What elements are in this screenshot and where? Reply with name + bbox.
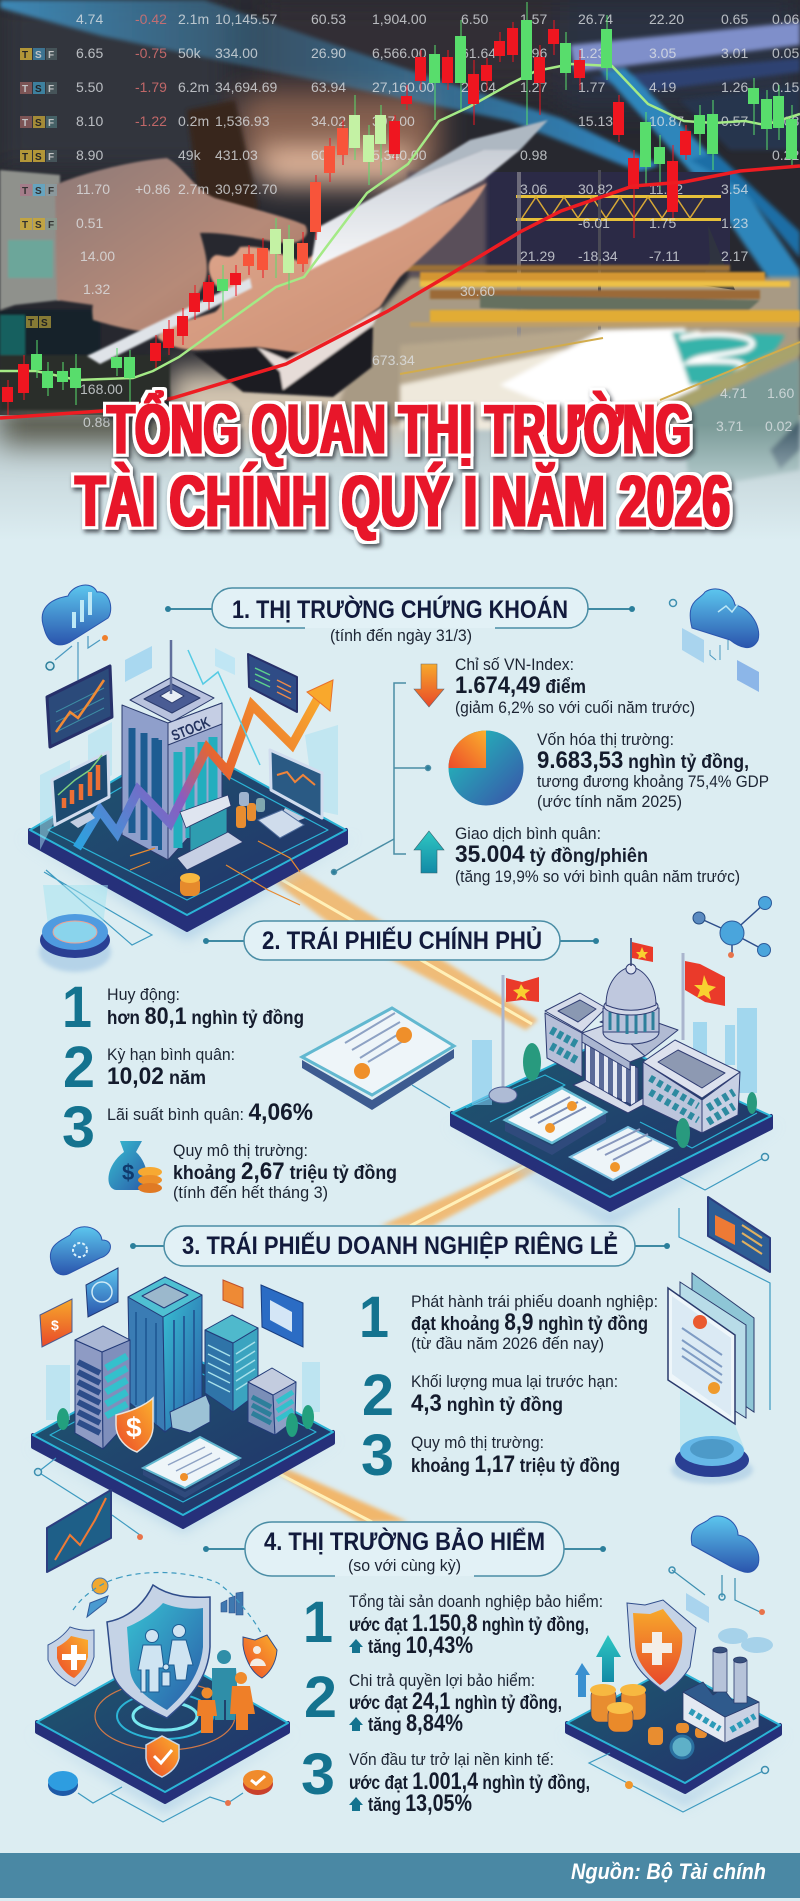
section 1 illustration: stock market: [20, 640, 356, 972]
dollar shield: $: [126, 1412, 142, 1443]
stat: VN-Index: (giảm 6,2% so với cuối năm trước): [455, 698, 695, 717]
cloud icon section 3: [50, 1227, 110, 1275]
heading text: 1. THỊ TRƯỜNG CHỨNG KHOÁN: [232, 594, 568, 624]
header fade to background: [0, 425, 800, 541]
market data table: 1.27: [520, 79, 547, 95]
photo: suit shoulder: [187, 100, 258, 232]
icon: money bag: [108, 1141, 162, 1193]
stat: market cap: 9.683,53 nghìn tỷ đồng,: [537, 747, 749, 774]
market data table: 0.65: [721, 11, 748, 27]
item 1: Phát hành trái phiếu doanh nghiệp:: [411, 1292, 658, 1311]
section 3 illustration: corporate towers: [26, 1268, 340, 1540]
market data table: 22.20: [649, 11, 684, 27]
market data table: 34.02: [311, 113, 346, 129]
chart panel: [47, 1490, 111, 1572]
market size: Quy mô thị trường:: [173, 1141, 308, 1160]
stat: market cap: tương đương khoảng 75,4% GDP: [537, 772, 769, 791]
stock sign: STOCK: [169, 714, 213, 745]
right wing: [643, 1040, 740, 1133]
market data table: 14.00: [80, 248, 115, 264]
market data table: 6.2m: [178, 79, 209, 95]
market data table: 2.7m: [178, 181, 209, 197]
stat: market cap: Vốn hóa thị trường:: [537, 730, 674, 749]
note panel: [686, 1593, 709, 1623]
stat: VN-Index: [414, 655, 695, 717]
market data table: 2.1m: [178, 11, 209, 27]
cloud icon left: [42, 585, 111, 680]
icon: small up arrow: [349, 1717, 363, 1731]
T S F ticker flags: T: [28, 318, 34, 329]
item 3: Lãi suất bình quân: 4,06%: [107, 1099, 313, 1126]
market data table: 6.65: [76, 45, 103, 61]
market data table: 334.00: [215, 45, 258, 61]
T S F ticker flags: S: [35, 118, 42, 129]
T S F ticker flags: T: [22, 50, 28, 61]
item 2: [362, 1363, 618, 1428]
market data table: 5,340.00: [372, 147, 427, 163]
market data table: [76, 11, 799, 434]
circuit lines: [78, 1787, 243, 1822]
item 3: ước đạt 1.001,4 nghìn tỷ đồng,: [349, 1768, 590, 1795]
stat: VN-Index: 1.674,49 điểm: [455, 672, 586, 699]
section 4 illustration: coins and factory: [560, 1600, 787, 1812]
monitor: top left chart: [47, 666, 112, 747]
coin stacks: [590, 1684, 707, 1745]
item 1: hơn 80,1 nghìn tỷ đồng: [107, 1003, 304, 1030]
market data table: 3.06: [520, 181, 547, 197]
family group: [197, 1650, 255, 1733]
market size: [173, 1141, 397, 1202]
platform: [446, 1040, 780, 1226]
person with coin: [87, 1578, 108, 1617]
lobby: [177, 795, 243, 870]
item 3: [361, 1423, 620, 1488]
heading text: 2. TRÁI PHIẾU CHÍNH PHỦ: [262, 925, 542, 955]
heading text: 4. THỊ TRƯỜNG BẢO HIỂM: [264, 1526, 545, 1556]
red candlesticks: [2, 20, 691, 415]
photo: left sleeve and dark panel: [0, 170, 170, 410]
market data table: 0.57: [721, 113, 748, 129]
item 1: [359, 1285, 658, 1353]
trees: [523, 1043, 757, 1148]
item 1: 1: [303, 1590, 333, 1655]
item 2: ước đạt 24,1 nghìn tỷ đồng,: [349, 1688, 562, 1715]
dome: [600, 964, 678, 1056]
market data table: 11.52: [649, 181, 683, 197]
wires: [38, 1458, 140, 1535]
connector wires: [412, 1085, 765, 1190]
market data table: +0.86: [135, 181, 171, 197]
heading connector: [168, 608, 632, 610]
market data table: 30,972.70: [215, 181, 277, 197]
stat bracket: [332, 683, 430, 874]
market data table: 30.82: [578, 181, 613, 197]
icon tile: money bag: $: [51, 1317, 59, 1333]
stat: market cap: (ước tính năm 2025): [537, 792, 682, 811]
market data table: 60: [311, 147, 327, 163]
item 3: 3: [361, 1423, 394, 1488]
item 2: [304, 1665, 562, 1737]
green moving average line: [0, 64, 800, 380]
T S F ticker flags: S: [35, 84, 42, 95]
market data table: -1.22: [135, 113, 167, 129]
section 3 stat list: [359, 1285, 658, 1488]
trees: [57, 1405, 314, 1437]
stat: average trading: Giao dịch bình quân:: [455, 824, 601, 843]
T S F ticker flags: T: [22, 118, 28, 129]
T S F ticker flags: F: [48, 50, 54, 61]
market data table: 3.05: [649, 45, 676, 61]
section 4 heading: [203, 1522, 606, 1576]
item 2: 2: [63, 1035, 95, 1100]
market data table: 431.03: [215, 147, 258, 163]
T S F ticker flags: F: [48, 118, 54, 129]
market data table: 1.57: [520, 11, 547, 27]
certificates on hologram base: [668, 1273, 754, 1484]
keyboard: [258, 810, 304, 838]
icon: small up arrow: [349, 1797, 363, 1811]
market size: khoảng 2,67 triệu tỷ đồng: [173, 1158, 397, 1185]
section 1 heading: [165, 588, 635, 645]
heading pill: [244, 921, 560, 960]
icon tile: chart: [223, 1280, 243, 1308]
skyline hologram: [472, 1008, 757, 1105]
market data table: 1.26: [721, 79, 748, 95]
item 2: Kỳ hạn bình quân:: [107, 1045, 235, 1064]
coin stacks: [180, 792, 265, 896]
capitol: [545, 964, 740, 1133]
photo: suit cuff and dark sleeve: [193, 307, 383, 397]
market data table: 1,536.93: [215, 113, 270, 129]
title: [75, 389, 730, 542]
market data table: 61.64: [461, 45, 496, 61]
smoke puffs: [718, 1628, 773, 1653]
market data table: 2.17: [721, 248, 748, 264]
item 3: tăng 13,05%: [368, 1790, 472, 1817]
market data table: 6,566.00: [372, 45, 427, 61]
photo: holding hand: [157, 183, 487, 353]
stat: VN-Index: Chỉ số VN-Index:: [455, 655, 574, 674]
item 1: [303, 1590, 603, 1659]
market data table: 8.90: [76, 147, 103, 163]
T S F ticker flags: T: [22, 220, 28, 231]
market data table: 0.05: [772, 45, 799, 61]
item 2: Khối lượng mua lại trước hạn:: [411, 1372, 618, 1391]
heading text: 3. TRÁI PHIẾU DOANH NGHIỆP RIÊNG LẺ: [182, 1230, 618, 1260]
market data table: 5.50: [76, 79, 103, 95]
left tower: [75, 1326, 130, 1449]
platform shadow: [20, 836, 356, 940]
T S F ticker flags: F: [48, 186, 54, 197]
platform: [26, 1352, 340, 1532]
hologram disc: [39, 885, 111, 972]
factory: [683, 1647, 759, 1743]
circuit lines: [589, 1753, 765, 1812]
heading note: (tính đến ngày 31/3): [330, 626, 472, 645]
market data table: 673.34: [372, 352, 415, 368]
growth chart arrow: [77, 680, 333, 848]
footer bar: [0, 1853, 800, 1898]
item 1: đạt khoảng 8,9 nghìn tỷ đồng: [411, 1309, 648, 1336]
skyline hologram: [46, 1362, 320, 1420]
section 2 illustration: government building: [302, 938, 780, 1226]
market data table: 6.50: [461, 11, 488, 27]
market data table: 1.32: [83, 281, 110, 297]
market data table: 4.71: [720, 385, 747, 401]
orange light beams between sections: [253, 864, 542, 1522]
icon: up arrow: [414, 831, 444, 873]
market data table: 1.77: [578, 79, 605, 95]
icon: down arrow: [414, 664, 444, 707]
photo: blue beam: [0, 0, 800, 325]
section 2 stat list: [62, 975, 397, 1202]
section 4 stat list: [301, 1590, 603, 1817]
platform: [30, 740, 346, 930]
market data table: 10,145.57: [215, 11, 277, 27]
market data table: 1.75: [649, 215, 676, 231]
market data table: 0.98: [520, 147, 547, 163]
molecule icon: [693, 896, 772, 958]
market data table: 4.74: [76, 11, 103, 27]
document stack: on platform: [505, 1088, 606, 1155]
discs: [48, 1770, 273, 1796]
market data table: -1.79: [135, 79, 167, 95]
small shield left: [48, 1627, 94, 1686]
heading pill: [212, 588, 588, 628]
bar icon: [221, 1592, 243, 1615]
item 1: Huy động:: [107, 985, 180, 1004]
pie chart: [448, 730, 524, 806]
tower: stock building: [122, 640, 222, 860]
monitor: bar chart: [52, 752, 109, 828]
data panel: [248, 654, 297, 712]
stat: market cap: [448, 730, 769, 811]
T S F ticker flags: S: [41, 318, 48, 329]
T S F ticker flags: F: [48, 220, 54, 231]
item 2: 2: [362, 1363, 394, 1428]
T S F ticker flags: T: [22, 186, 28, 197]
photo: night scene: [330, 170, 800, 490]
left wing: [545, 993, 606, 1077]
market size: (tính đến hết tháng 3): [173, 1183, 328, 1202]
heading pill: [164, 1226, 635, 1266]
flag: left: [489, 975, 539, 1103]
market data table: -0.75: [135, 45, 167, 61]
platform: [30, 1652, 294, 1812]
orange shield: [627, 1600, 696, 1692]
item 2: Chi trả quyền lợi bảo hiểm:: [349, 1671, 535, 1690]
small screen icon: [708, 1197, 770, 1272]
item 3: Quy mô thị trường:: [411, 1433, 544, 1452]
item 2: 10,02 năm: [107, 1063, 206, 1090]
item 3: [62, 1095, 313, 1160]
market data table: 1,904.00: [372, 11, 427, 27]
section 4 illustration: insurance shield: [30, 1573, 294, 1822]
market data table: 0.22: [772, 147, 799, 163]
platform: [560, 1667, 787, 1806]
market data table: 3.01: [721, 45, 748, 61]
market data table: 10.87: [649, 113, 684, 129]
market data table: 30.60: [460, 283, 495, 299]
market data table: 26.74: [578, 11, 613, 27]
item 1: tăng 10,43%: [368, 1632, 473, 1659]
market data table: 168.00: [80, 381, 123, 397]
item 1: (từ đầu năm 2026 đến nay): [411, 1334, 604, 1353]
market data table: 63.94: [311, 79, 346, 95]
tall tower: [128, 1277, 202, 1432]
photo: tablet: [87, 120, 548, 364]
document stack: floating: [302, 1008, 454, 1110]
market data table: -6.01: [578, 215, 610, 231]
icon: money bag: $: [122, 1160, 134, 1185]
T S F ticker flags: S: [35, 220, 42, 231]
certificate stack: [668, 1273, 754, 1424]
market data table: 0.51: [76, 215, 103, 231]
check shield: [146, 1736, 179, 1777]
market data table: 21.29: [520, 248, 555, 264]
market data table: 49k: [178, 147, 202, 163]
lobby block: [170, 1395, 210, 1433]
item 1: Tổng tài sản doanh nghiệp bảo hiểm:: [349, 1592, 603, 1611]
T S F ticker flags: F: [48, 152, 54, 163]
hologram base: [671, 1390, 753, 1484]
flag: center: [631, 938, 653, 966]
icon: small up arrow: [349, 1639, 363, 1653]
market data table: 15.13: [578, 113, 613, 129]
T S F ticker flags: T: [22, 84, 28, 95]
market data table: 0.15: [772, 79, 799, 95]
left connector wire: [44, 870, 152, 945]
market data table: 1.96: [520, 45, 547, 61]
red moving average line: [0, 166, 800, 418]
heading pill: [245, 1522, 564, 1576]
icon tile: building: [261, 1285, 303, 1347]
family figures: [138, 1624, 193, 1692]
stat: average trading: 35.004 tỷ đồng/phiên: [455, 841, 648, 868]
T S F ticker flags: S: [35, 152, 42, 163]
item 2: tăng 8,84%: [368, 1710, 463, 1737]
mid tower: [205, 1315, 258, 1412]
item 1: ước đạt 1.150,8 nghìn tỷ đồng,: [349, 1610, 589, 1637]
market data table: 0.2m: [178, 113, 209, 129]
item 1: 1: [62, 975, 92, 1040]
item 3: 3: [301, 1742, 335, 1807]
dashed orbit: [73, 1573, 262, 1635]
source note: Nguồn: Bộ Tài chính: [571, 1859, 766, 1884]
market data table: 397.00: [372, 113, 415, 129]
market data table: 26.04: [461, 79, 496, 95]
notes: [125, 646, 152, 682]
cloud icon right: [670, 589, 759, 692]
cloud icon section 4: [669, 1516, 765, 1615]
hologram panels behind: [40, 722, 338, 850]
flag: right: [683, 953, 725, 1040]
market data table: -7.11: [649, 248, 680, 264]
document: [143, 1437, 240, 1498]
T S F ticker flags: S: [35, 186, 42, 197]
market data table: 0.08: [772, 113, 799, 129]
section 3 heading: [130, 1226, 670, 1266]
icon tile: globe: [86, 1268, 118, 1317]
item 3: 3: [62, 1095, 95, 1160]
market data table: 0.88: [83, 414, 110, 430]
item 3: Vốn đầu tư trở lại nền kinh tế:: [349, 1750, 554, 1769]
market data table: -18.34: [578, 248, 618, 264]
gear: [671, 1736, 693, 1758]
photo: pointing hand: [55, 158, 307, 333]
market data table: 60.53: [311, 11, 346, 27]
stat: average trading: (tăng 19,9% so với bình quân năm trước): [455, 867, 740, 886]
right tower: [248, 1368, 296, 1435]
item 1: 1: [359, 1285, 389, 1350]
big shield: [107, 1585, 210, 1718]
market data table: -0.42: [135, 11, 167, 27]
market data table: 0.06: [772, 11, 799, 27]
section 2 heading: [203, 921, 599, 960]
green candlesticks: [31, 2, 797, 405]
market data table: 1.60: [767, 385, 794, 401]
heading note: (so với cùng kỳ): [348, 1556, 461, 1575]
wire to certificate: [679, 1208, 770, 1410]
market data table: 27,160.00: [372, 79, 434, 95]
item 1: [62, 975, 304, 1040]
market data table: 3.54: [721, 181, 748, 197]
market data table: 1.23: [721, 215, 748, 231]
market data table: 3.71: [716, 418, 743, 434]
icon tile: money bag: [40, 1299, 72, 1347]
T S F ticker flags: F: [48, 84, 54, 95]
header photo collage: [0, 0, 800, 541]
market data table: 34,694.69: [215, 79, 277, 95]
T S F ticker flags: [20, 48, 57, 329]
item 2: [63, 1035, 235, 1100]
item 2: 2: [304, 1665, 337, 1730]
portico: [573, 1024, 645, 1113]
market data table: 50k: [178, 45, 202, 61]
growth arrows: [575, 1635, 621, 1697]
dollar shield: [116, 1398, 153, 1452]
T S F ticker flags: S: [35, 50, 42, 61]
market data table: 11.70: [76, 181, 110, 197]
market data table: 0.02: [765, 418, 792, 434]
monitor: right chart: [270, 750, 322, 822]
item 2: 4,3 nghìn tỷ đồng: [411, 1390, 563, 1417]
item 3: khoảng 1,17 triệu tỷ đồng: [411, 1451, 620, 1478]
orange circuit traces: [130, 841, 300, 905]
market data table: 8.10: [76, 113, 103, 129]
item 3: [301, 1742, 590, 1817]
small shield right: [243, 1635, 277, 1678]
market data table: 26.90: [311, 45, 346, 61]
document: flat on platform: [570, 1127, 672, 1180]
stat: average trading: [414, 824, 740, 886]
market data table: 4.19: [649, 79, 676, 95]
market data table: 1.23: [578, 45, 605, 61]
T S F ticker flags: T: [22, 152, 28, 163]
